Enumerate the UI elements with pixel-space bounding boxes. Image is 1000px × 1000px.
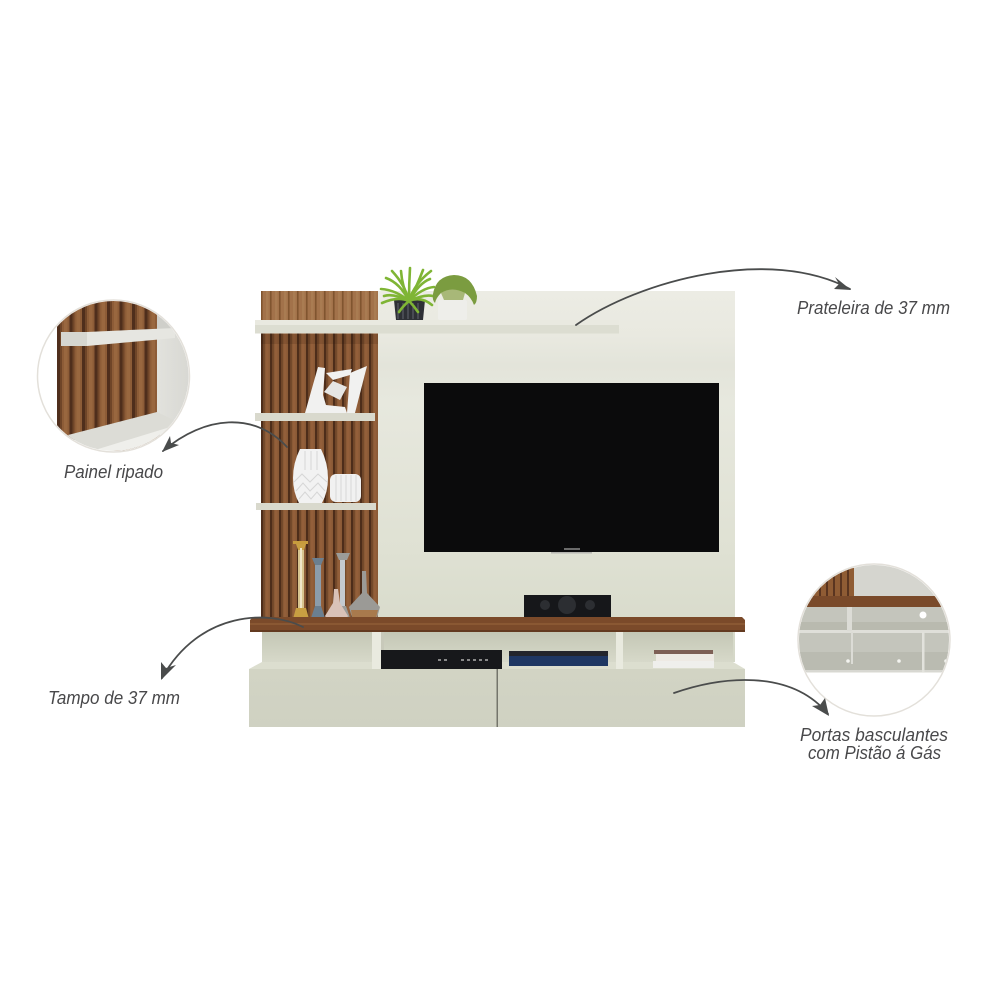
silver candle holder xyxy=(336,553,350,618)
plant: fern in dark pot xyxy=(381,268,434,320)
slatted wood panel xyxy=(261,291,378,618)
pink glass bottle xyxy=(325,589,348,621)
niche dividers xyxy=(372,632,623,669)
white ribbed vase xyxy=(330,474,361,502)
label: slatted panel: Painel ripado xyxy=(64,462,163,482)
middle shelf xyxy=(255,413,375,421)
white faceted vase xyxy=(293,449,328,503)
wood top xyxy=(250,617,745,632)
label: wood top: Tampo de 37 mm xyxy=(48,688,180,708)
right door xyxy=(498,669,745,727)
television xyxy=(424,383,719,554)
black receiver xyxy=(381,650,502,669)
furniture: TV panel xyxy=(249,268,745,727)
center speaker xyxy=(524,595,611,618)
label: doors: com Pistão á Gás xyxy=(808,743,941,763)
left door xyxy=(249,669,496,727)
label: shelf: Prateleira de 37 mm xyxy=(797,298,950,318)
arrow: wood top xyxy=(161,618,303,680)
blue blu-ray player xyxy=(509,651,608,666)
blue candle holder xyxy=(310,558,326,621)
smoky glass bottle xyxy=(349,571,380,618)
gold candle holder xyxy=(293,541,309,619)
sculpture xyxy=(305,366,367,413)
arrow: slatted panel xyxy=(162,422,287,452)
back panel xyxy=(378,291,735,662)
top shelf xyxy=(255,320,619,334)
stacked books xyxy=(653,650,714,668)
label: doors xyxy=(800,725,948,763)
arrow: top shelf xyxy=(576,269,851,325)
lower niche xyxy=(249,632,745,669)
detail inset: gas-piston doors xyxy=(798,563,951,716)
lower shelf xyxy=(256,503,376,510)
plant: hanging green in white pot xyxy=(433,275,477,320)
arrow: doors xyxy=(674,680,829,716)
label: doors: Portas basculantes xyxy=(800,725,948,745)
detail inset: slatted panel xyxy=(38,300,195,460)
